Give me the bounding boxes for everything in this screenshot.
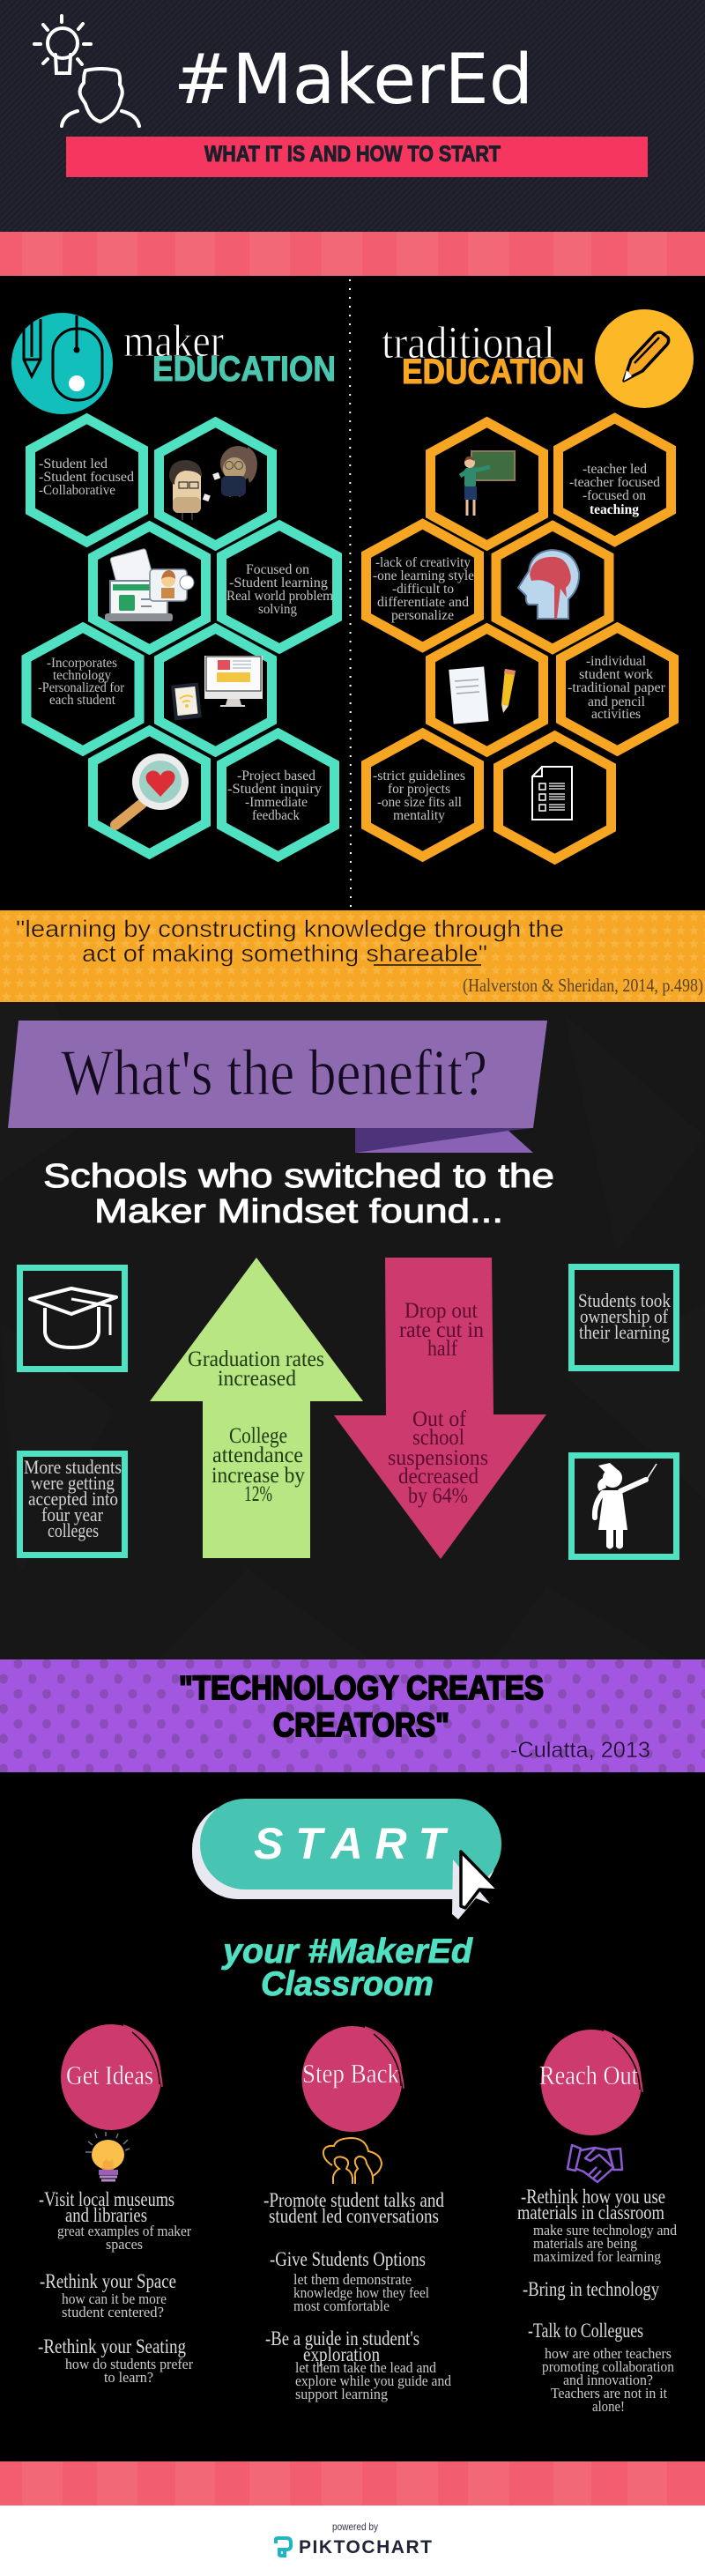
box: ownership: ownership of (580, 1305, 669, 1327)
piktochart wordmark: PIKTOCHART (299, 2537, 432, 2557)
text: reach out list: promoting collaboration (542, 2358, 674, 2375)
text: teacher led: -teacher focused (569, 475, 660, 490)
quotation (179, 1670, 544, 1744)
text: project based: -Immediate (245, 795, 308, 810)
text: get ideas list: -Visit local museums (39, 2188, 174, 2210)
pink down arrow (334, 1258, 546, 1559)
text: student led (39, 457, 134, 498)
maker education heading (11, 313, 336, 414)
text: teacher led: -focused on (583, 488, 646, 503)
benefit section background (0, 1002, 705, 1659)
text: reach out list: how are other teachers (545, 2345, 672, 2362)
text: reach out list: materials in classroom (517, 2201, 664, 2223)
text: individual work: -traditional paper (568, 680, 666, 695)
hexagon: characters (159, 422, 271, 546)
maker education heading: EDUCATION (152, 350, 336, 389)
pink down arrow: half (427, 1337, 458, 1361)
hexagon: strict guidelines (367, 733, 479, 857)
text: strict guidelines: -one size fits all (377, 795, 463, 810)
text: individual work (568, 654, 666, 722)
text: get ideas list (38, 2188, 193, 2386)
icon: light bulb (34, 16, 91, 73)
text: get ideas list: how can it be more (62, 2290, 167, 2307)
title: #MakerEd (174, 41, 533, 120)
text: teacher led: teaching (590, 502, 639, 517)
badge: get ideas: Get Ideas (66, 2060, 153, 2090)
badge: step back: Step Back (302, 2058, 399, 2089)
illustration: magnifier with heart (115, 753, 189, 825)
text: get ideas list: -Rethink your Space (40, 2270, 176, 2292)
traditional education heading: EDUCATION (402, 353, 584, 391)
hexagon: student led (30, 419, 143, 542)
pink down arrow: by 64% (408, 1484, 468, 1508)
text: project based (227, 768, 322, 823)
text: individual work: and pencil (588, 694, 646, 709)
text: step back list: exploration (303, 2343, 380, 2365)
hexagon: project based (222, 733, 335, 857)
box: ownership: their learning (579, 1321, 670, 1343)
pink down arrow: suspensions (388, 1446, 488, 1470)
badge: get ideas (61, 2024, 162, 2130)
hexagon: laptop (93, 526, 206, 650)
text: lack of creativity: personalize (391, 608, 454, 623)
hexagon: teacher (430, 422, 543, 546)
box: more students accepted: colleges (48, 1519, 99, 1541)
quotation: CREATORS" (273, 1707, 449, 1744)
benefit ribbon heading (8, 1021, 547, 1153)
illustration: two students (169, 446, 257, 520)
start heading: Classroom (261, 1965, 434, 2003)
icon: cursor (452, 1852, 499, 1919)
maker education heading: maker (123, 316, 224, 367)
box: more students accepted: More students (24, 1456, 122, 1478)
text: strict guidelines (373, 768, 465, 823)
text: strict guidelines: -strict guidelines (373, 768, 465, 783)
green up arrow: 12% (244, 1482, 272, 1506)
icon: person outline (62, 69, 139, 126)
illustration: notepad and pencil (449, 666, 516, 724)
pink down arrow: decreased (398, 1465, 479, 1488)
hexagon: lack of creativity (367, 523, 479, 647)
pink band bottom (0, 2461, 705, 2505)
box: more students accepted: four year (41, 1503, 104, 1526)
maker hexagons (26, 419, 337, 857)
pink band top (0, 232, 705, 276)
text: reach out list: materials are being (533, 2235, 637, 2252)
maker hexagon text (38, 457, 334, 823)
text: step back list: support learning (295, 2386, 388, 2402)
illustration: laptop and profile (105, 548, 194, 621)
text: project based: feedback (252, 808, 300, 823)
quotation: "TECHNOLOGY CREATES (179, 1670, 544, 1707)
divider (350, 279, 351, 910)
quotation: act of making something shareable" (82, 940, 487, 967)
text: incorporates technology: -Incorporates (47, 656, 117, 671)
comparison section background (0, 276, 705, 910)
pink down arrow: school (412, 1426, 464, 1450)
text: lack of creativity: -lack of creativity (375, 555, 471, 570)
quote band (0, 910, 705, 1002)
pink down arrow: rate cut in (399, 1318, 484, 1342)
text: incorporates technology (38, 656, 125, 708)
text: reach out list (517, 2186, 677, 2415)
quotation (16, 916, 564, 967)
start heading (221, 1933, 473, 2003)
icon: handshake (568, 2145, 622, 2182)
illustration: head with brain (518, 550, 579, 619)
hexagon: monitor (159, 628, 271, 752)
subheading (43, 1158, 554, 1230)
text: step back list: explore while you guide and (295, 2372, 451, 2389)
box: teaching student (571, 1456, 677, 1556)
purple quote band (0, 1659, 705, 1772)
green up arrow: College (229, 1424, 287, 1448)
box: more students accepted: accepted into (28, 1488, 118, 1510)
text: teacher led: -teacher led (583, 462, 647, 477)
box: ownership (571, 1267, 677, 1368)
text: focused on: Real world problem (226, 589, 334, 604)
text: step back list: -Be a guide in student's (265, 2327, 419, 2350)
text: strict guidelines: mentality (393, 808, 445, 823)
badge: step back (301, 2026, 404, 2132)
icon: mouse and pencil (11, 313, 113, 414)
text: get ideas list: to learn? (104, 2369, 153, 2386)
subheading: Maker Mindset found... (94, 1193, 503, 1230)
badge: reach out (539, 2030, 642, 2135)
illustration: monitor and tablet (171, 656, 263, 720)
text: get ideas list: how do students prefer (65, 2356, 193, 2372)
start button: START (254, 1819, 449, 1868)
text: project based: -Student inquiry (227, 782, 322, 797)
text: incorporates technology: each student (49, 693, 116, 708)
hexagon: brain (496, 525, 609, 649)
quotation: "learning by constructing knowledge through the (16, 916, 564, 942)
green up arrow: increase by (212, 1464, 305, 1488)
column: step back (263, 2026, 451, 2402)
box: more students accepted: were getting (31, 1472, 115, 1494)
subtitle banner (66, 137, 648, 177)
illustration: teacher at chalkboard (460, 451, 515, 516)
box: more students accepted (19, 1454, 125, 1555)
box: graduation cap (19, 1267, 125, 1370)
text: focused on: -Student learning (229, 575, 328, 590)
text: focused on (226, 562, 334, 617)
icon: student pointing (595, 1463, 657, 1549)
text: get ideas list: spaces (106, 2236, 143, 2253)
badge: reach out: Reach Out (539, 2060, 638, 2090)
hexagon: checklist (499, 736, 612, 859)
text: reach out list: alone! (592, 2398, 625, 2415)
green up arrow: Graduation rates (188, 1347, 324, 1371)
text: step back list: -Give Students Options (270, 2248, 426, 2270)
text: student led: -Student focused (39, 470, 134, 485)
text: project based: -Project based (237, 768, 315, 783)
traditional education heading (382, 309, 694, 408)
text: focused on: Focused on (246, 562, 309, 577)
illustration: checklist (532, 767, 572, 820)
text: lack of creativity: differentiate and (377, 595, 469, 610)
text: individual work: -individual (586, 654, 647, 669)
icon: pencil in yellow circle (595, 309, 694, 408)
hexagon: incorporates technology (26, 627, 139, 751)
hexagon: magnifier (93, 731, 206, 854)
benefit ribbon heading: What's the benefit? (61, 1037, 487, 1110)
footer (0, 2505, 705, 2576)
icon: people in cloud (323, 2138, 382, 2184)
hexagon: individual work (560, 627, 673, 751)
green up arrow (150, 1258, 363, 1558)
text: step back list: let them demonstrate (293, 2271, 412, 2288)
text: reach out list: -Bring in technology (523, 2278, 659, 2300)
text: reach out list: make sure technology and (533, 2222, 677, 2238)
icon: light bulb (85, 2132, 130, 2180)
text: focused on: solving (258, 602, 297, 617)
text: strict guidelines: for projects (388, 782, 450, 797)
traditional education heading: traditional (382, 318, 555, 368)
hexagon: teacher led (559, 418, 672, 541)
text: reach out list: -Talk to Collegues (528, 2320, 643, 2342)
text: teacher led (569, 462, 660, 517)
box: ownership: Students took (578, 1289, 671, 1311)
text: incorporates technology: technology (53, 668, 111, 683)
text: reach out list: maximized for learning (533, 2248, 661, 2265)
text: incorporates technology: -Personalized for (38, 680, 125, 695)
text: step back list (263, 2189, 451, 2402)
header panel (0, 0, 705, 232)
text: lack of creativity (373, 555, 474, 623)
start section background (0, 1772, 705, 2461)
column: get ideas (38, 2024, 193, 2386)
pink down arrow: Out of (412, 1407, 467, 1431)
powered by: powered by (332, 2520, 378, 2533)
column: reach out (517, 2030, 677, 2415)
text: lack of creativity: -difficult to (392, 582, 454, 597)
traditional hexagon text (373, 462, 666, 823)
traditional hexagons (367, 418, 673, 859)
green up arrow: attendance (212, 1444, 303, 1467)
pink down arrow: Drop out (404, 1299, 478, 1323)
text: individual work: activities (591, 707, 641, 722)
icon: graduation cap (30, 1288, 116, 1347)
icon: piktochart logo (276, 2538, 291, 2556)
start button (192, 1799, 501, 1919)
subtitle banner: WHAT IT IS AND HOW TO START (204, 142, 501, 167)
text: individual work: student work (579, 667, 653, 682)
text: reach out list: and innovation? (563, 2372, 653, 2388)
hexagon: notepad (430, 628, 543, 752)
start heading: your #MakerEd (221, 1933, 473, 1971)
text: step back list: most comfortable (293, 2298, 390, 2314)
text: get ideas list: student centered? (62, 2304, 164, 2320)
text: step back list: -Promote student talks and (263, 2189, 444, 2211)
hexagon: focused on (222, 525, 337, 649)
text: step back list: student led conversations (269, 2205, 439, 2227)
text: get ideas list: -Rethink your Seating (38, 2335, 186, 2357)
text: reach out list: -Rethink how you use (521, 2186, 665, 2208)
text: student led: -Collaborative (39, 483, 115, 498)
text: reach out list: Teachers are not in it (551, 2385, 667, 2402)
subheading: Schools who switched to the (43, 1158, 554, 1195)
text: step back list: let them take the lead and (295, 2359, 436, 2376)
text: step back list: knowledge how they feel (293, 2284, 429, 2301)
text: student led: -Student led (39, 457, 108, 471)
green up arrow: increased (218, 1367, 296, 1391)
citation: -Culatta, 2013 (510, 1738, 650, 1763)
text: get ideas list: and libraries (65, 2204, 147, 2226)
text: lack of creativity: -one learning style (373, 568, 474, 583)
text: get ideas list: great examples of maker (57, 2223, 191, 2239)
